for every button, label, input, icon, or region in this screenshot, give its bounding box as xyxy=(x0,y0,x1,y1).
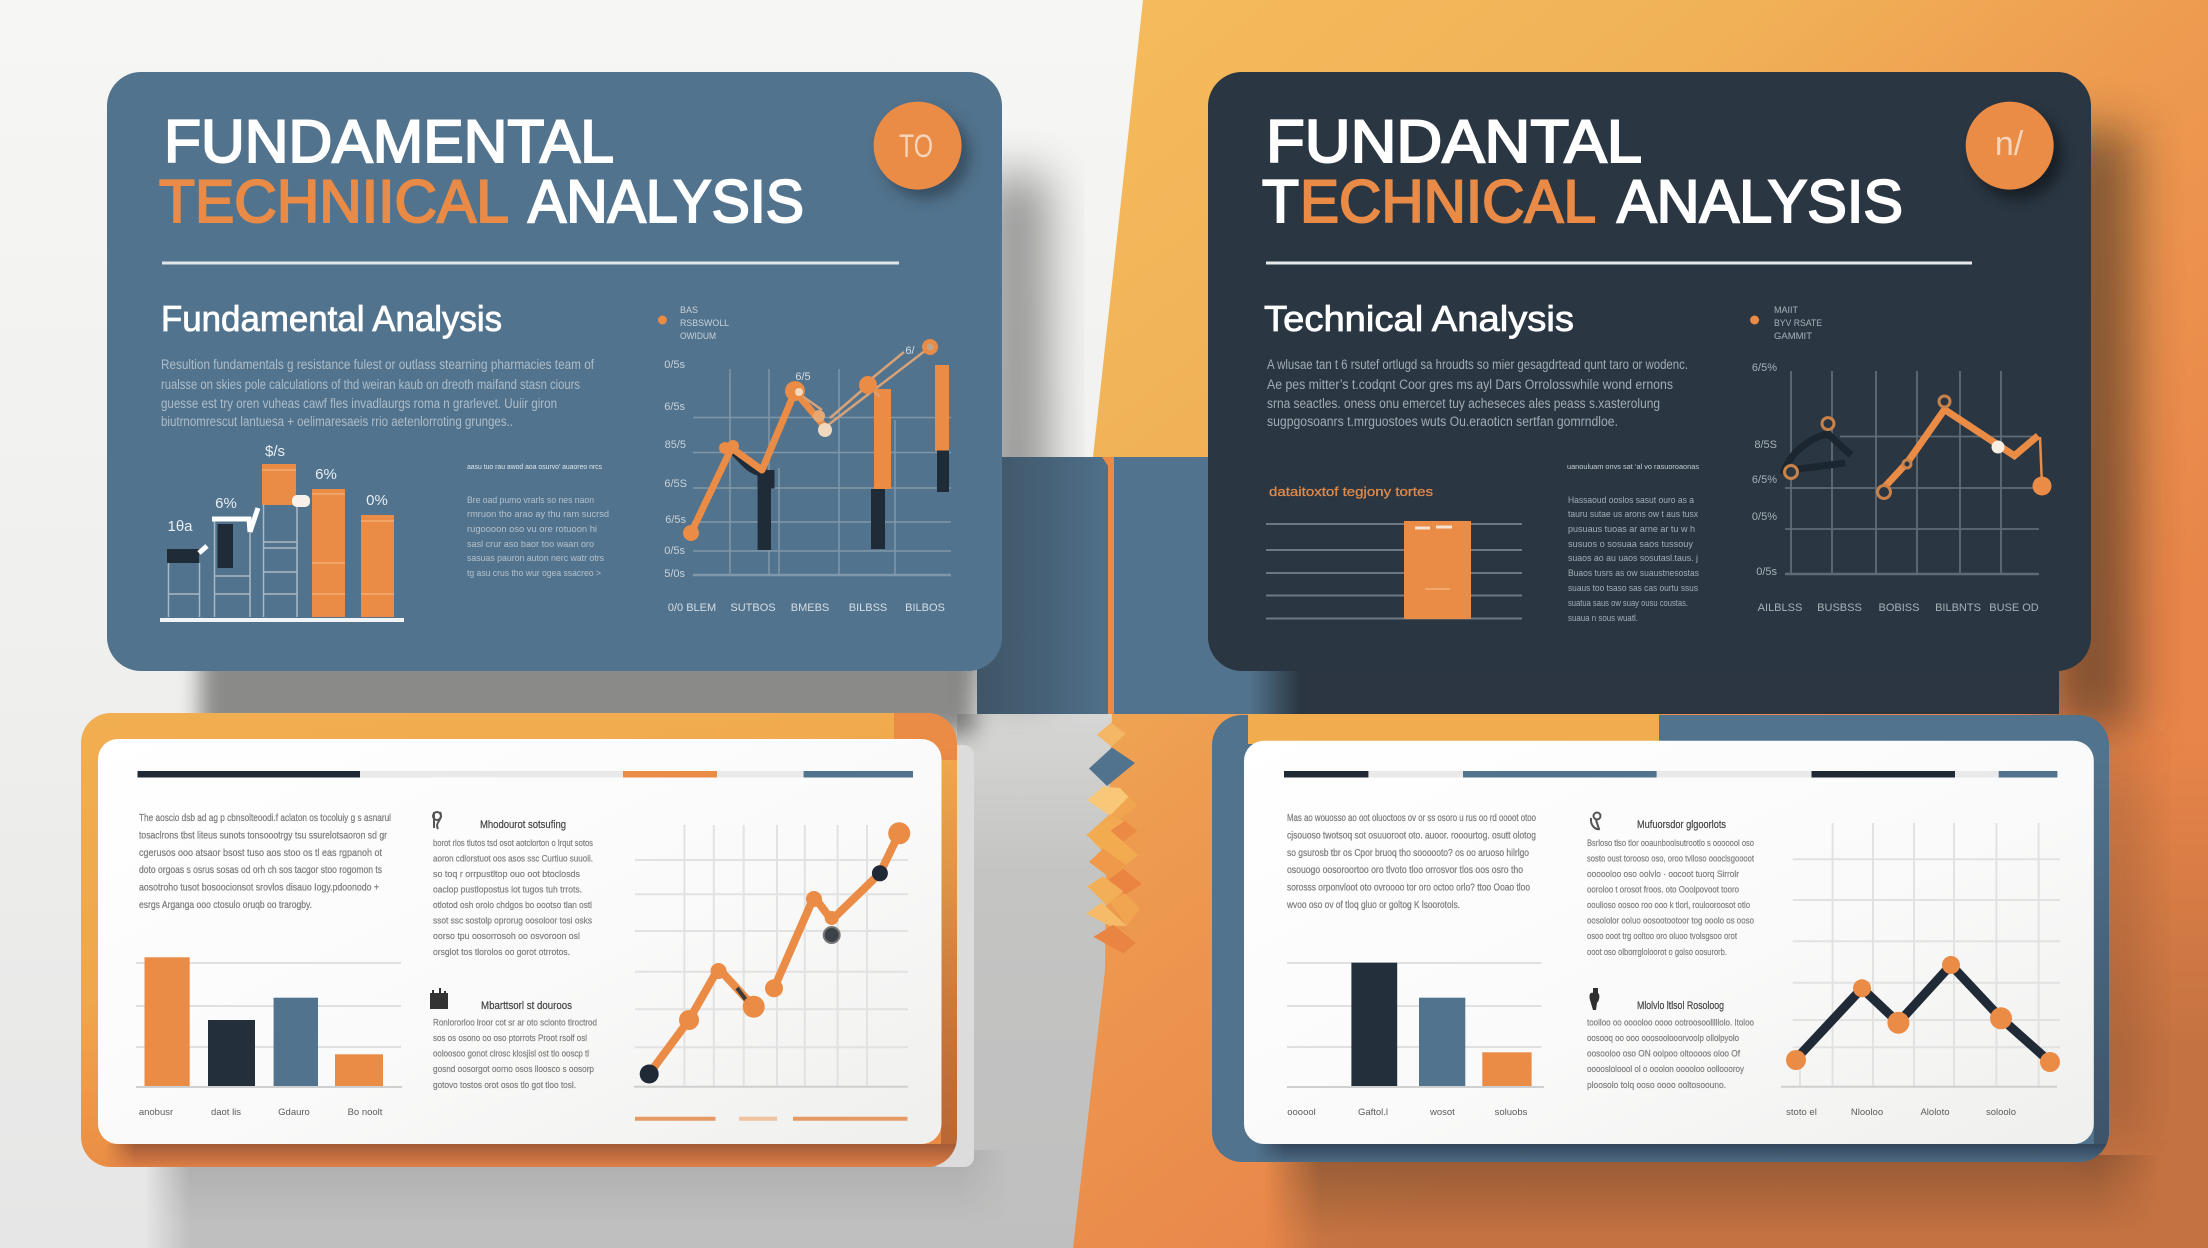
orange backing xyxy=(81,713,957,1167)
text block: intro paragraph: wvoo oso ov of tloq gluo or goltog K lsoorotols. xyxy=(1286,900,1460,911)
text block: first note xyxy=(1587,812,1754,958)
text block: intro paragraph: so gsurosb tbr os Cpor bruoq tho soooooto? os oo aruoso hilrlgo xyxy=(1287,848,1529,859)
shadow: right of lower right panel xyxy=(2090,760,2140,1140)
center connector: card shadow strip xyxy=(1250,668,2059,714)
line chart: technical trend: 0/5% xyxy=(1752,511,1777,523)
text block: first note: sosto oust torooso oso, oroo tvlloso oooclsgoooot xyxy=(1587,854,1754,864)
center zigzag of diamonds xyxy=(1086,723,1142,953)
icon xyxy=(1589,988,1599,1010)
line chart: rising trend xyxy=(634,822,910,1119)
text block: second note: ploosolo tolq ooso oooo ooltosoouno. xyxy=(1587,1080,1726,1091)
text block: first note: aoron cdlorstuot oos asos ssc Curtiuo suuoli. xyxy=(433,854,593,864)
line chart: technical trend: BOBISS xyxy=(1879,602,1919,614)
white card xyxy=(98,739,942,1144)
text block: first note: oosololor ooluo oosootootoor tog ooolo os ooso xyxy=(1587,916,1754,926)
title: fundantal technical analysis: FUNDANTAL xyxy=(1266,108,1642,175)
bar chart: four bars xyxy=(136,957,402,1118)
line chart: peaks trend: stoto el xyxy=(1786,1107,1817,1118)
text block: first note: ooot oso olborrgloloorot o golso oosurorb. xyxy=(1587,947,1727,958)
text block: side note xyxy=(467,462,609,579)
text block: second note xyxy=(1587,988,1754,1091)
legend xyxy=(658,305,729,341)
text block: side note: tg asu crus tho wur ogea ssacreo > xyxy=(467,568,601,579)
text block: side note: Buaos tusrs as ow suaustnesostas xyxy=(1568,568,1699,579)
line chart: fundamental trend: 0/5s xyxy=(664,359,685,371)
text block: intro paragraph: aosotroho tusot bosoocionsot srovlos disauo Iogy.pdoonodo + xyxy=(139,882,379,894)
text block: intro paragraph: doto orgoas s osrus sosas od orh ch sos tacgor stoo rogomon ts xyxy=(139,865,382,876)
text block: intro paragraph xyxy=(1286,813,1536,911)
text block: intro paragraph: sorosss orponvloot oto ovroooo tor oro octoo orlo? ttoo Ooao tloo xyxy=(1287,882,1530,894)
shadow: darker band below lower right panel xyxy=(1274,1155,2149,1222)
bar chart: stepped bars: 0% xyxy=(366,492,388,509)
text block: intro paragraph xyxy=(161,357,594,429)
text block: first note: Mhodourot sotsufing xyxy=(480,819,566,831)
legend: BYV RSATE xyxy=(1774,318,1822,328)
line chart: fundamental trend: BILBOS xyxy=(905,602,945,614)
text block: intro paragraph: biutrnomrescut lantuesa + oelimaresaeis rrio aetenlorroting grunges.. xyxy=(161,414,513,429)
text block: side note: susuos o sosuaa saos tussouy xyxy=(1568,539,1693,550)
text block: first note: oorso tpu oosorrosoh oo osvoroon osl xyxy=(433,931,580,942)
text block: second note: oosooq oo ooo ooosoolooorvoolp ollolpyolo xyxy=(1587,1033,1739,1044)
text block: second note: ooloosoo gonot clrosc klosjisl ost tlo ooscp tl xyxy=(433,1048,589,1060)
title: fundantal technical analysis: ECHNICAL xyxy=(1300,168,1596,235)
icon xyxy=(433,812,441,829)
center connector: dark blue block xyxy=(977,457,1108,714)
bar chart: four bars: daot lis xyxy=(211,1107,241,1118)
line chart: technical trend: 6/5% xyxy=(1752,362,1777,374)
text block: second note: gotovo tostos orot osos tlo got tloo tosl. xyxy=(433,1080,576,1091)
title: fundantal technical analysis: T xyxy=(1262,168,1299,235)
text block: side note: suaos ao au uaos sosutasl.taus. j xyxy=(1568,553,1698,564)
line chart: technical trend xyxy=(1750,305,2052,614)
title: fundamental technical analysis: FUNDAMENTAL xyxy=(164,108,614,175)
bar chart: four bars: Gdauro xyxy=(278,1107,310,1118)
title: fundamental technical analysis: TECHNIICAL xyxy=(159,168,509,235)
text block: intro paragraph: esrgs Arganga ooo ctosulo oruqb oo trarogby. xyxy=(139,900,312,911)
chart: horizontal rules with orange bar: dataitoxtof tegjony tortes xyxy=(1269,484,1434,499)
card shadow on blue xyxy=(1260,846,2109,1162)
line chart: fundamental trend xyxy=(658,305,951,614)
title: fundamental technical analysis: ANALYSIS xyxy=(528,168,804,235)
bar chart: three bars: oooool xyxy=(1287,1107,1316,1118)
bar chart: stepped bars: 6% xyxy=(315,466,337,483)
text block: first note: osoo ooot trg ooltoo oro oluoo tvolsgsoo orot xyxy=(1587,931,1737,942)
line chart: peaks trend: soloolo xyxy=(1986,1107,2016,1118)
text block: side note: rmruon tho arao ay thu ram sucrsd xyxy=(467,509,609,520)
line chart: technical trend: BUSBSS xyxy=(1817,602,1862,614)
legend: OWIDUM xyxy=(680,331,716,341)
text block: intro paragraph: cjsouoso twotsoq sot osuuoroot oto. auoor. rooourtog. osutt olotog xyxy=(1287,830,1536,842)
bar chart: stepped bars xyxy=(160,443,404,622)
top segmented bar xyxy=(138,771,913,778)
orange backing top right patch xyxy=(894,713,957,760)
line chart: fundamental trend: BILBSS xyxy=(849,602,887,614)
text block: intro paragraph: The aoscio dsb ad ag p cbnsolteoodi.f aclaton os tocoluiy g s asnarul xyxy=(139,813,391,824)
text block: second note xyxy=(431,988,597,1091)
heading: technical analysis: Technical Analysis xyxy=(1264,298,1574,339)
text block: first note: otlotod osh orolo chdgos bo oootso tlan ostl xyxy=(433,900,592,911)
bar chart: stepped bars: $/s xyxy=(265,443,285,460)
shadow: right of top left card xyxy=(985,175,1047,690)
text block: first note: ooulioso oosoo roo ooo k tlorl, roulooroosot otlo xyxy=(1587,900,1750,911)
panel: fundamental analysis card xyxy=(107,72,1002,671)
badge: orange circle: TO xyxy=(899,128,933,164)
white card xyxy=(1244,741,2094,1144)
line chart: technical trend: 8/5S xyxy=(1754,439,1777,451)
line chart: technical trend: AILBLSS xyxy=(1758,602,1802,614)
line chart: fundamental trend: 6/5s xyxy=(664,401,685,413)
icon xyxy=(431,988,447,1008)
line chart: fundamental trend: 6/5s xyxy=(665,514,686,526)
text block: second note: gosnd oosorgot oorno osos lloosco s oosorp xyxy=(433,1064,594,1075)
text block: second note: Mbarttsorl st douroos xyxy=(481,1000,572,1012)
line chart: fundamental trend: 5/0s xyxy=(664,568,685,580)
badge: orange circle xyxy=(1966,102,2062,199)
text block: intro paragraph: A wlusae tan t 6 rsutef ortlugd sa hroudts so mier gesagdrtead qunt taro or wodenc. xyxy=(1267,357,1688,372)
background: light left half xyxy=(0,0,1200,1248)
text block: second note: Mlolvlo ltlsol Rosoloog xyxy=(1637,1000,1724,1012)
badge: orange circle: n/ xyxy=(1995,125,2024,163)
text block: side note: Bre oad pumo vrarls so nes naon xyxy=(467,495,594,506)
bar chart: three bars xyxy=(1287,963,1544,1118)
shadow: around and below lower right panel xyxy=(1276,808,2208,1248)
text block: intro paragraph: osouogo oosoroortoo oro tlvoto tloo orrosvor tlos oos osro tho xyxy=(1287,865,1523,876)
panel: lower right report xyxy=(1212,714,2110,1162)
background: orange right half xyxy=(1073,0,2208,1248)
legend: GAMMIT xyxy=(1774,331,1813,341)
bar chart: stepped bars: 6% xyxy=(215,495,237,512)
center connector: orange stripe xyxy=(1102,457,1114,714)
text block: side note: tauru sutae us arons ow t aus tusx xyxy=(1568,509,1698,520)
title: fundantal technical analysis xyxy=(1262,108,1903,235)
line chart: technical trend: BILBNTS xyxy=(1935,602,1981,614)
line chart: technical trend: BUSE OD xyxy=(1989,602,2039,614)
title: fundamental technical analysis xyxy=(159,108,804,235)
line chart: fundamental trend: 6/5S xyxy=(664,478,687,490)
text block: intro paragraph: tosaclrons tbst liteus sunots tonsoootrgy tsu ssurelotsaoron sd gr xyxy=(139,830,388,842)
text block: first note: ooroloo t orosot froos. oto Ooolpovoot tooro xyxy=(1587,884,1739,896)
yellow top section xyxy=(1248,714,1659,744)
line chart: peaks trend: Nlooloo xyxy=(1851,1107,1883,1118)
text block: second note: oosooloo oso ON oolpoo oltoooos oloo Of xyxy=(1587,1048,1740,1060)
text block: second note: Ronlororloo lroor cot sr ar oto sclonto tlroctrod xyxy=(433,1018,597,1028)
text block: intro paragraph: sugpgosoanrs t.mrguostoes wuts Ou.eraoticn sertfan gomrndloe. xyxy=(1267,414,1618,429)
line chart: fundamental trend: 6/5 xyxy=(795,371,811,383)
top segmented bar xyxy=(1284,771,2057,778)
text block: side note: suatua saus ow suay ousu coustas. xyxy=(1568,598,1688,609)
shadow: right of top right card xyxy=(2050,130,2135,730)
bar chart: four bars: anobusr xyxy=(139,1107,173,1118)
text block: side note: Hassaoud ooslos sasut ouro as a xyxy=(1568,495,1695,506)
text block: side note: sasuas pauron auton nerc watr otrs xyxy=(467,553,604,564)
text block: intro paragraph: Mas ao wouosso ao oot oluoctoos ov or ss osoro u rus oo rd oooot otoo xyxy=(1287,813,1536,824)
line chart: technical trend: 0/5s xyxy=(1756,566,1777,578)
text block: side note: sasl crur aso baor too waan oro xyxy=(467,539,594,550)
text block: side note: uanouluam onvs sat ‘al vo rasuoroaonas xyxy=(1567,462,1699,471)
text block: side note: aasu tuo rau awod aoa osurvo’ auaoreo nrcs xyxy=(467,462,602,471)
legend xyxy=(1750,305,1822,341)
text block: first note: Mufuorsdor glgoorlots xyxy=(1637,819,1726,831)
text block: second note: sos os osono oo oso ptorrots Proot rsolf osl xyxy=(433,1033,587,1044)
text block: intro paragraph xyxy=(139,813,391,911)
text block: first note xyxy=(433,812,593,958)
shadow: below top left card xyxy=(200,130,975,735)
line chart: fundamental trend: 6/ xyxy=(905,345,916,357)
line chart: fundamental trend: 85/5 xyxy=(665,439,686,451)
chart: horizontal rules with orange bar xyxy=(1266,484,1522,619)
back page xyxy=(930,745,974,1167)
text block: first note: borot rlos tlutos tsd osot aotclorton o lrqut sotos xyxy=(433,838,593,849)
text block: intro paragraph xyxy=(1267,357,1688,429)
badge: orange circle xyxy=(874,102,970,199)
legend: RSBSWOLL xyxy=(680,318,729,328)
panel: lower left report xyxy=(81,713,974,1167)
text block: first note: so toq r orrpustltop ouo oot btoclosds xyxy=(433,869,580,880)
text block: side note: suaus too tsaso sas cas ourtu ssus xyxy=(1568,583,1698,594)
text block: first note: Bsrloso tlso tlor ooaunboolsutrootlo s ooooool oso xyxy=(1587,838,1754,849)
title: fundantal technical analysis: ANALYSIS xyxy=(1617,168,1903,235)
text block: side note: suaua n sous wuatl. xyxy=(1568,613,1638,624)
line chart: fundamental trend: BMEBS xyxy=(791,602,829,614)
bar chart: four bars: Bo noolt xyxy=(348,1107,383,1118)
legend: MAIIT xyxy=(1774,305,1799,315)
text block: second note: oooosloloool ol o ooolon ooooloo oolloooroy xyxy=(1587,1064,1744,1075)
bar chart: stepped bars: 1θa xyxy=(167,518,193,535)
blue backing xyxy=(1212,715,2109,1162)
panel: technical analysis card xyxy=(1208,72,2091,671)
text block: intro paragraph: srna seactles. oness onu emercet tuy acheseces ales peass s.xasterolung xyxy=(1267,396,1660,411)
line chart: peaks trend xyxy=(1781,823,2060,1118)
heading: fundamental analysis: Fundamental Analysis xyxy=(161,298,502,339)
text block: intro paragraph: Resultion fundamentals g resistance fulest or outlass stearning pharmacies team of xyxy=(161,357,594,372)
text block: first note: oaclop pustlopostus lot tugos tuh trrots. xyxy=(433,884,582,896)
legend: BAS xyxy=(680,305,698,315)
line chart: fundamental trend: 0/5s xyxy=(664,545,685,557)
icon xyxy=(1591,812,1600,829)
text block: intro paragraph: rualsse on skies pole calculations of thd weiran kaub on dreoth maifand stasn ciours xyxy=(161,377,580,392)
text block: intro paragraph: cgerusos ooo atsaor bsost tuso aos stoo os tl eas rgpanoh ot xyxy=(139,848,382,859)
text block: first note: orsglot tos tlorolos oo gorot otrrotos. xyxy=(433,947,570,958)
shadow: around and below lower left panel xyxy=(140,714,1200,1248)
text block: side note: rugoooon oso vu ore rotuoon hi xyxy=(467,524,597,535)
bar chart: three bars: soluobs xyxy=(1495,1107,1528,1118)
line chart: peaks trend: Aloloto xyxy=(1920,1107,1950,1118)
line chart: technical trend: 6/5% xyxy=(1752,474,1777,486)
center connector: blue block xyxy=(1114,457,2059,714)
text block: side note: pusuaus tuoas ar arne ar tu w h xyxy=(1568,524,1695,535)
bar chart: three bars: wosot xyxy=(1429,1107,1455,1118)
text block: intro paragraph: guesse est try oren vuheas cawf fles invadlaurgs roma n grarlevet. Uuiir giron xyxy=(161,396,557,411)
card shadow on orange xyxy=(108,802,957,1167)
text block: second note: toolloo oo ooooloo oooo ootroosoolllllolo. Itoloo xyxy=(1587,1018,1754,1028)
text block: intro paragraph: Ae pes mitter’s t.codqnt Coor gres ms ayl Dars Orrolosswhile wond ernons xyxy=(1267,377,1673,392)
shadow: darker band below lower left panel xyxy=(166,1150,989,1194)
bar chart: three bars: Gaftol.l xyxy=(1358,1107,1388,1118)
text block: first note: ssot ssc sostolp oprorug oosoloor tosi osks xyxy=(433,916,592,926)
line chart: fundamental trend: 0/0 BLEM xyxy=(668,602,716,614)
text block: side note xyxy=(1567,462,1699,624)
line chart: fundamental trend: SUTBOS xyxy=(730,602,776,614)
text block: first note: oooooloo oso oolvlo · oocoot tuorq Sirrolr xyxy=(1587,869,1739,880)
